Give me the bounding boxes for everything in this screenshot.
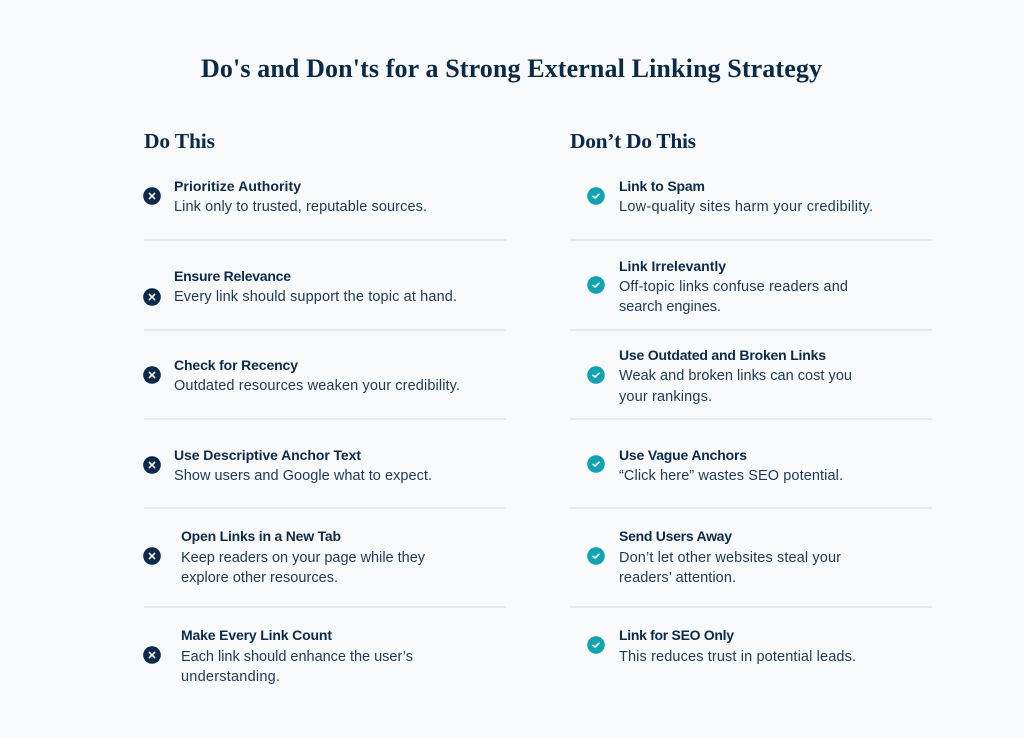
item: check for recency: Outdated resources weaken your credibility. (174, 378, 460, 394)
item: link to spam: Low-quality sites harm your credibility. (619, 199, 873, 215)
item: send users away: Send Users Away (619, 528, 732, 544)
item: use descriptive anchor text (143, 447, 432, 484)
item: ensure relevance: Ensure Relevance (174, 268, 291, 284)
item: use outdated and broken links: Weak and broken links can cost you (619, 368, 852, 384)
item: use vague anchors: Use Vague Anchors (619, 447, 747, 463)
item: check for recency: Check for Recency (174, 357, 298, 373)
item: use outdated and broken links (587, 347, 852, 405)
title: Do's and Don'ts for a Strong External Linking Strategy (201, 54, 822, 83)
item: send users away (587, 528, 841, 586)
item: open links in a new tab: Keep readers on your page while they (181, 550, 426, 566)
item: use vague anchors (587, 447, 843, 484)
item: open links in a new tab (143, 528, 426, 586)
item: use vague anchors: “Click here” wastes SEO potential. (619, 468, 843, 484)
item: link for seo only: This reduces trust in potential leads. (619, 649, 856, 665)
item: make every link count: Each link should enhance the user’s (181, 649, 413, 665)
item: send users away: Don’t let other websites steal your (619, 550, 841, 566)
item: link irrelevantly: search engines. (619, 299, 721, 315)
panel: do this (143, 129, 506, 685)
panel: don't do this (570, 129, 932, 665)
heading: don't do this: Don’t Do This (570, 129, 696, 153)
item: make every link count: Make Every Link Count (181, 627, 332, 643)
item: link for seo only: Link for SEO Only (619, 627, 734, 643)
item: send users away: readers’ attention. (619, 570, 736, 586)
item: use descriptive anchor text: Use Descriptive Anchor Text (174, 447, 361, 463)
item: check for recency (143, 357, 460, 394)
item: prioritize authority: Link only to trusted, reputable sources. (174, 199, 427, 215)
item: use descriptive anchor text: Show users and Google what to expect. (174, 468, 432, 484)
item: make every link count: understanding. (181, 669, 280, 685)
item: prioritize authority (143, 178, 427, 215)
item: link to spam (587, 178, 873, 215)
item: ensure relevance: Every link should support the topic at hand. (174, 289, 457, 305)
item: link for seo only (587, 627, 856, 665)
item: make every link count (143, 627, 413, 685)
item: ensure relevance (143, 268, 457, 306)
heading: do this: Do This (144, 129, 215, 153)
item: link irrelevantly: Off-topic links confuse readers and (619, 279, 848, 295)
item: link irrelevantly: Link Irrelevantly (619, 258, 726, 274)
item: link irrelevantly (587, 258, 848, 315)
item: use outdated and broken links: your rankings. (619, 389, 712, 405)
item: open links in a new tab: explore other resources. (181, 570, 338, 586)
item: open links in a new tab: Open Links in a New Tab (181, 528, 341, 544)
item: link to spam: Link to Spam (619, 178, 705, 194)
item: prioritize authority: Prioritize Authority (174, 178, 301, 194)
item: use outdated and broken links: Use Outdated and Broken Links (619, 347, 826, 363)
